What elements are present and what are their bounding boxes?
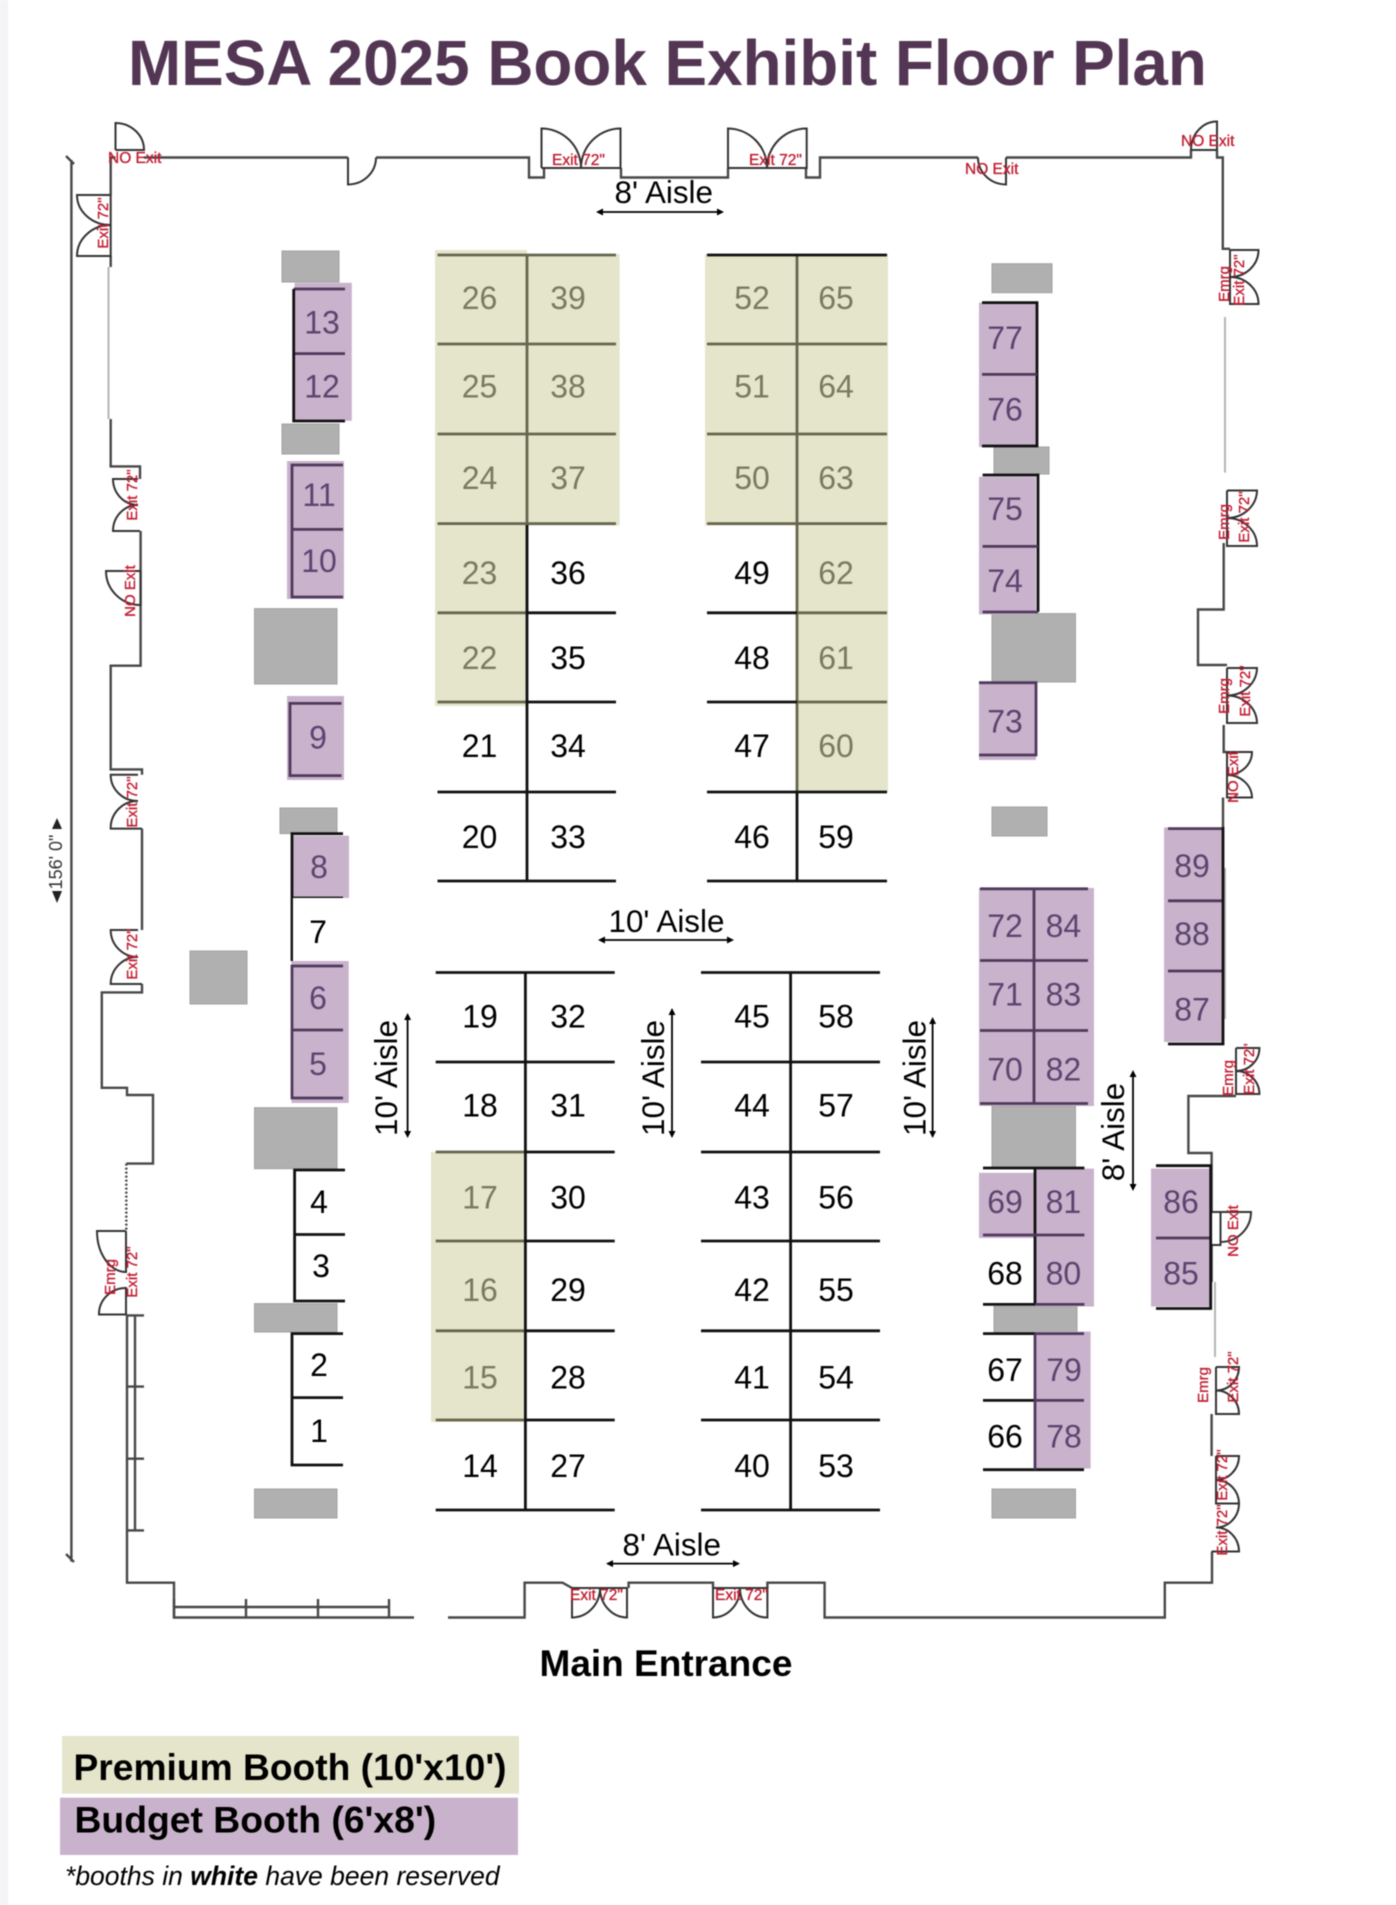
doors: [77, 122, 1259, 1618]
booth 6: [292, 961, 349, 1030]
booth 50: [705, 434, 797, 526]
booth 63: 63: [818, 460, 854, 496]
booth 1: 1: [310, 1413, 328, 1449]
booth 64: [797, 344, 888, 434]
booth 54: 54: [818, 1360, 854, 1396]
booth 16: 16: [462, 1272, 498, 1308]
booth 35: [527, 613, 616, 702]
booth 27: 27: [550, 1448, 586, 1484]
door labels: NO Exit: [965, 161, 1019, 178]
right center booths 66-84: [979, 303, 1094, 1470]
booth 59: [797, 792, 887, 881]
aisle label: top 8': [596, 175, 724, 216]
booth 25: [435, 344, 527, 434]
booth 25: 25: [462, 368, 497, 404]
booth 71: 71: [987, 976, 1023, 1012]
booth 72: 72: [987, 908, 1023, 944]
booth 76: [979, 374, 1036, 447]
booth 52: [705, 254, 797, 344]
booth block: 20-26 and 33-39: [435, 250, 620, 881]
booth 80: 80: [1046, 1256, 1081, 1292]
booth 52: 52: [734, 280, 770, 316]
booth 5: [292, 1030, 349, 1103]
door labels: NO Exit: [1225, 1204, 1242, 1257]
door labels: Exit 72": [570, 1587, 623, 1604]
booth 86: 86: [1163, 1184, 1199, 1220]
door labels: Emrg: [1216, 678, 1233, 714]
booth 85: 85: [1163, 1256, 1199, 1292]
booth 12: 12: [304, 368, 340, 404]
booth 44: 44: [734, 1088, 770, 1124]
booth 16: [431, 1241, 525, 1331]
booth 66: 66: [987, 1418, 1023, 1454]
booth 79: 79: [1046, 1352, 1082, 1388]
booth 28: 28: [550, 1360, 586, 1396]
booth 9: 9: [309, 719, 327, 755]
booth block: 46-52 and 59-65: [705, 254, 888, 881]
booth 2: [293, 1334, 343, 1398]
door labels: NO Exit: [122, 564, 139, 617]
booth 88: 88: [1174, 916, 1210, 952]
booth 82: 82: [1046, 1052, 1081, 1088]
booth 57: [791, 1062, 880, 1152]
booth 41: [701, 1331, 791, 1420]
booth 84: [1034, 888, 1094, 960]
aisle label: vertical 10' center: 10' Aisle: [636, 1020, 671, 1136]
booth 86: [1151, 1169, 1210, 1238]
booth 6: 6: [309, 980, 327, 1016]
left column booths 1-13: [287, 283, 352, 1465]
booth 7: 7: [309, 914, 327, 950]
booth 10: 10: [301, 543, 337, 579]
booth 67: [983, 1334, 1035, 1400]
door labels: Exit 72": [95, 197, 112, 249]
aisle label: vertical 10' left: 10' Aisle: [369, 1020, 404, 1136]
hall length dimension: [46, 156, 74, 1562]
booth 24: [435, 434, 527, 524]
booth 78: [1034, 1400, 1091, 1468]
booth 72: [979, 888, 1034, 960]
booth 43: 43: [734, 1180, 770, 1216]
door labels: [95, 133, 1258, 1604]
booth 12: [295, 354, 352, 421]
booth 17: 17: [462, 1180, 498, 1216]
booth 64: 64: [818, 368, 854, 404]
booth 85: [1151, 1238, 1210, 1306]
booth 14: 14: [462, 1448, 498, 1484]
door labels: Exit 72": [1214, 1504, 1231, 1556]
booth 39: [527, 254, 620, 344]
booth 83: 83: [1046, 976, 1081, 1012]
booth 89: 89: [1174, 848, 1210, 884]
booth 21: [438, 706, 527, 792]
booth 3: [295, 1234, 345, 1301]
booth 49: [707, 526, 797, 613]
booth 51: 51: [734, 368, 770, 404]
booth 54: [791, 1331, 880, 1420]
booth 45: [701, 972, 791, 1062]
booth 23: 23: [462, 555, 497, 591]
booth 49: 49: [734, 555, 770, 591]
booth 20: 20: [462, 819, 497, 855]
main entrance label: Main Entrance: [540, 1643, 792, 1684]
aisle label: bottom 8': [606, 1528, 740, 1567]
booth 80: [1035, 1235, 1094, 1306]
booth 13: 13: [304, 304, 340, 340]
booth 68: [983, 1238, 1035, 1304]
aisle label: vertical 10' right: 10' Aisle: [898, 1020, 932, 1136]
door labels: Emrg: [1195, 1367, 1212, 1403]
legend note: *booths in white have been reserved: [65, 1861, 501, 1891]
door labels: Exit 72": [1214, 1449, 1231, 1501]
booth 48: [707, 613, 797, 702]
booth 55: 55: [818, 1272, 854, 1308]
aisle label: middle 10': 10' Aisle: [608, 904, 724, 939]
door labels: Exit 72": [124, 928, 141, 980]
aisle label: vertical 8': 8' Aisle: [1096, 1083, 1131, 1181]
booth 65: [797, 254, 888, 344]
door labels: Exit 72": [1237, 665, 1254, 717]
aisle label: bottom 8': 8' Aisle: [622, 1528, 721, 1562]
booth 76: 76: [987, 392, 1023, 428]
booth 82: [1034, 1030, 1094, 1106]
booth 39: 39: [550, 280, 586, 316]
booth 40: [701, 1420, 791, 1510]
booth 42: [701, 1241, 791, 1331]
booth 55: [791, 1241, 880, 1331]
booth 10: [287, 529, 344, 599]
booth 18: [436, 1062, 525, 1152]
booth 58: [791, 972, 880, 1062]
booth 2: 2: [310, 1347, 328, 1383]
booth 33: 33: [550, 819, 586, 855]
booth 14: [436, 1422, 525, 1510]
booth 8: 8: [310, 849, 328, 885]
booth 19: 19: [462, 998, 498, 1034]
door labels: Exit 72": [1231, 254, 1248, 306]
booth 63: [797, 434, 888, 524]
door labels: Emrg: [102, 1259, 119, 1295]
booth 30: [525, 1152, 615, 1241]
door labels: Exit 72": [715, 1587, 768, 1604]
booth 18: 18: [462, 1088, 498, 1124]
booth 36: 36: [550, 555, 586, 591]
booth 29: 29: [550, 1272, 586, 1308]
booth 41: 41: [734, 1360, 770, 1396]
booth 78: 78: [1046, 1418, 1082, 1454]
door labels: Exit 72": [1236, 491, 1253, 543]
booth 69: [979, 1173, 1034, 1238]
booth 60: [797, 702, 888, 792]
booth 27: [525, 1420, 615, 1510]
title: MESA 2025 Book Exhibit Floor Plan: [128, 27, 1207, 99]
door labels: Emrg: [1220, 1060, 1237, 1096]
booth 81: 81: [1046, 1184, 1081, 1220]
booth 87: [1164, 971, 1223, 1042]
booth 83: [1034, 960, 1094, 1030]
booth 21: 21: [462, 728, 497, 764]
booth 77: 77: [987, 320, 1023, 356]
booth 11: 11: [302, 477, 336, 513]
right wall booths 85-89: [1151, 827, 1223, 1308]
booth 29: [525, 1241, 615, 1331]
booth 81: [1035, 1169, 1094, 1235]
booth 61: [797, 613, 888, 702]
legend: budget booth: Budget Booth (6'x8'): [74, 1798, 436, 1840]
booth 68: 68: [987, 1256, 1023, 1292]
booth 24: 24: [462, 460, 497, 496]
door labels: Exit 72": [552, 152, 605, 169]
door labels: NO Exit: [108, 150, 162, 167]
door labels: Emrg: [1216, 504, 1233, 540]
booth 15: [431, 1331, 525, 1422]
booth 13: [295, 283, 352, 354]
booth 58: 58: [818, 998, 854, 1034]
booth 46: [707, 792, 797, 881]
door labels: Exit 72": [124, 1246, 141, 1298]
booth 77: [979, 303, 1036, 374]
hall length dimension: 156' 0": [46, 835, 66, 889]
booth 61: 61: [818, 640, 854, 676]
booth 51: [705, 344, 797, 434]
booth 9: [287, 696, 344, 780]
booth 31: 31: [550, 1088, 586, 1124]
booth 59: 59: [818, 819, 854, 855]
booth 22: [435, 613, 527, 706]
booth 79: [1034, 1332, 1091, 1400]
booth 34: [527, 702, 616, 792]
door labels: Exit 72": [1241, 1043, 1258, 1095]
door labels: Exit 72": [124, 469, 141, 521]
booth 75: 75: [987, 491, 1023, 527]
booth 56: [791, 1152, 880, 1241]
booth 74: 74: [987, 563, 1023, 599]
booth 69: 69: [987, 1184, 1023, 1220]
booth 42: 42: [734, 1272, 770, 1308]
booth 66: [983, 1400, 1035, 1470]
booth 22: 22: [462, 640, 497, 676]
booth 87: 87: [1174, 991, 1210, 1027]
booth 75: [979, 477, 1036, 546]
booth 53: [791, 1420, 880, 1510]
booth 26: [435, 250, 527, 344]
booth 62: [797, 524, 888, 613]
booth 44: [701, 1062, 791, 1152]
booth 40: 40: [734, 1448, 770, 1484]
booth 28: [525, 1331, 615, 1420]
booth 53: 53: [818, 1448, 854, 1484]
booth 70: [979, 1030, 1034, 1106]
door labels: Emrg: [1216, 266, 1233, 302]
booth 23: [435, 524, 527, 613]
booth 31: [525, 1062, 615, 1152]
booth 73: 73: [987, 704, 1023, 740]
booth 88: [1164, 901, 1223, 971]
booth 15: 15: [462, 1360, 498, 1396]
booth 30: 30: [550, 1180, 586, 1216]
door labels: Exit 72": [124, 776, 141, 828]
legend: premium booth: [62, 1736, 519, 1794]
booth 47: 47: [734, 728, 770, 764]
booth 19: [436, 972, 525, 1062]
booth 32: 32: [550, 998, 586, 1034]
booth 47: [707, 702, 797, 792]
booth block: 40-45 and 53-58: [701, 972, 880, 1510]
booth 73: [979, 684, 1036, 760]
booth 50: 50: [734, 460, 770, 496]
booth 17: [431, 1152, 525, 1241]
booth 35: 35: [550, 640, 586, 676]
booth 60: 60: [818, 728, 854, 764]
booth 43: [701, 1152, 791, 1241]
door labels: NO Exit: [1225, 750, 1242, 803]
booth 8: [292, 836, 349, 898]
door labels: NO Exit: [1181, 133, 1235, 150]
booth 70: 70: [987, 1052, 1023, 1088]
booth 56: 56: [818, 1180, 854, 1216]
building walls: [102, 150, 1236, 1618]
booth 36: [527, 526, 616, 613]
legend: premium booth: Premium Booth (10'x10'): [74, 1746, 507, 1788]
booth 20: [438, 792, 527, 881]
booth 46: 46: [734, 819, 770, 855]
booth 32: [525, 972, 615, 1062]
booth 26: 26: [462, 280, 497, 316]
booth 33: [527, 792, 616, 881]
booth 1: [293, 1398, 343, 1465]
booth 37: 37: [550, 460, 586, 496]
booth 38: 38: [550, 368, 586, 404]
booth 4: [295, 1170, 345, 1234]
booth 45: 45: [734, 998, 770, 1034]
booth 37: [527, 434, 620, 526]
gray obstacles: [190, 251, 1077, 1518]
booth 57: 57: [818, 1088, 854, 1124]
booth 74: [979, 546, 1036, 614]
booth 71: [979, 960, 1034, 1030]
booth 38: [527, 344, 620, 434]
aisle label: top 8': 8' Aisle: [614, 175, 713, 210]
legend: budget booth: [60, 1798, 518, 1855]
booth 34: 34: [550, 728, 586, 764]
door labels: Exit 72": [749, 152, 802, 169]
booth block: 14-19 and 27-32: [431, 972, 615, 1510]
booth 11: [287, 461, 344, 529]
booth 67: 67: [987, 1352, 1023, 1388]
booth 5: 5: [309, 1046, 327, 1082]
booth 65: 65: [818, 280, 854, 316]
booth 7: [293, 898, 343, 961]
booth 4: 4: [310, 1184, 328, 1220]
booth 89: [1164, 827, 1223, 901]
booth 3: 3: [312, 1248, 330, 1284]
door labels: Exit 72": [1225, 1351, 1242, 1403]
booth 62: 62: [818, 555, 854, 591]
booth 84: 84: [1046, 908, 1081, 944]
booth 48: 48: [734, 640, 770, 676]
